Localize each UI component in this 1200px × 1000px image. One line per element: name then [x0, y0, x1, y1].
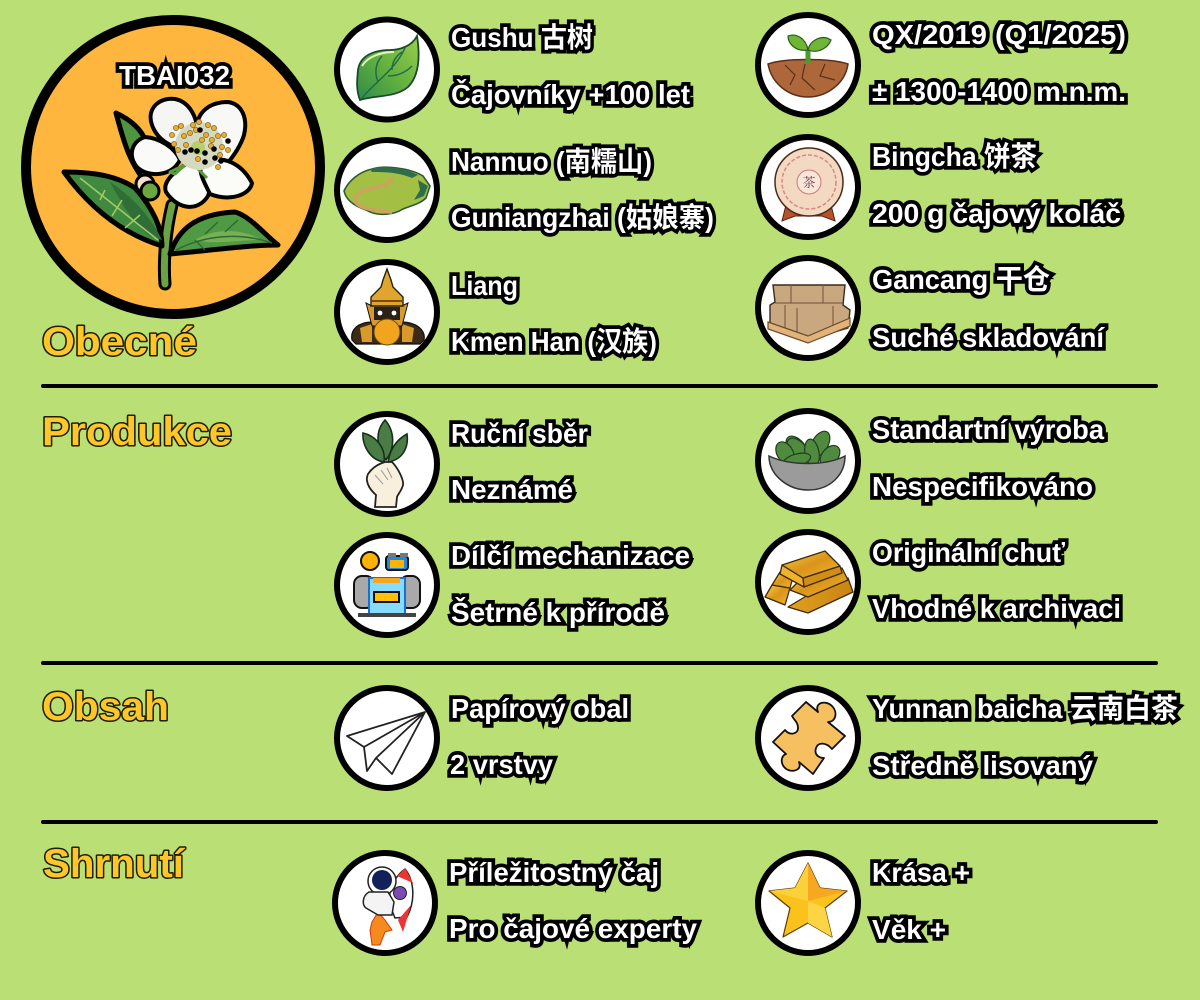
item: Originální chuť	[758, 532, 1121, 632]
text	[872, 537, 1121, 624]
text: Suché skladování	[872, 322, 1105, 353]
text	[450, 693, 629, 780]
text	[449, 857, 697, 944]
item: Bingcha	[758, 137, 1121, 237]
text: Věk +	[872, 914, 946, 945]
item: Příležitostný čaj	[335, 853, 697, 953]
illustration: tea flower	[64, 99, 278, 284]
item: Liang	[337, 262, 657, 362]
icon: hand with leaves	[337, 414, 437, 514]
item: Ruční sběr	[337, 414, 588, 514]
text	[451, 418, 588, 505]
text: Gushu 古树	[451, 22, 593, 53]
text	[872, 857, 970, 945]
text: Gancang 干仓	[872, 264, 1050, 295]
text: 2 vrstvy	[450, 749, 553, 780]
text	[872, 414, 1104, 502]
text: Neznámé	[451, 474, 573, 505]
icon: paper plane	[337, 688, 437, 788]
text	[451, 270, 657, 357]
panel: Produkce	[42, 410, 1121, 635]
text: Guniangzhai (姑娘寨)	[451, 202, 714, 233]
item: Krása	[758, 853, 970, 953]
item: Gushu	[337, 20, 690, 120]
item: Papírový obal	[337, 688, 629, 788]
icon: leaf	[337, 20, 437, 120]
icon: mountain landscape	[337, 140, 437, 240]
item: Gancang	[758, 258, 1105, 358]
text: Vhodné k archivaci	[872, 593, 1121, 624]
product code: TBAI032	[119, 60, 230, 91]
text: QX/2019 (Q1/2025)	[872, 19, 1126, 50]
text: Liang	[451, 270, 518, 301]
item: Standartní výroba	[758, 411, 1104, 511]
text	[872, 141, 1121, 229]
text: Krása +	[872, 857, 970, 888]
icon: bowl of leaves	[758, 411, 858, 511]
icon: astronaut on rocket	[335, 853, 435, 953]
item: QX/2019	[758, 15, 1126, 115]
text: ± 1300-1400 m.n.m.	[872, 76, 1126, 107]
text: Středně lisovaný	[872, 750, 1093, 781]
text: Pro čajové experty	[449, 913, 697, 944]
divider	[41, 661, 1158, 665]
item: Yunnan baicha	[758, 688, 1178, 788]
icon: seedling in soil	[758, 15, 858, 115]
text: Kmen Han (汉族)	[451, 326, 657, 357]
icon: machine	[337, 535, 437, 635]
heading: Obsah: Obsah	[42, 685, 169, 729]
text: Yunnan baicha 云南白茶	[872, 693, 1178, 724]
divider	[41, 384, 1158, 388]
text	[872, 264, 1105, 353]
panel: Obsah	[42, 685, 1178, 788]
icon: puzzle piece	[758, 688, 858, 788]
icon: tea cake: 茶	[802, 172, 816, 191]
icon: guardian figure	[337, 262, 437, 362]
divider	[41, 820, 1158, 824]
icon: gold bars	[758, 532, 858, 632]
heading: Obecné: Obecné	[42, 320, 197, 364]
panel: Obecné	[26, 15, 1126, 364]
text: Ruční sběr	[451, 418, 588, 449]
item: Nannuo	[337, 140, 714, 240]
panel: Shrnutí	[43, 842, 970, 953]
text: Příležitostný čaj	[449, 857, 659, 888]
text: Nannuo (南糯山)	[451, 146, 652, 177]
text	[451, 540, 690, 628]
text: Papírový obal	[451, 693, 629, 724]
text: Šetrné k přírodě	[451, 596, 665, 628]
text: Standartní výroba	[872, 414, 1104, 445]
text	[872, 19, 1126, 107]
icon: pallet of boxes	[758, 258, 858, 358]
text: 200 g čajový koláč	[872, 198, 1121, 229]
badge: tea flower TBAI032	[26, 20, 320, 314]
text: Dílčí mechanizace	[451, 540, 690, 571]
text: Nespecifikováno	[872, 471, 1093, 502]
text	[451, 146, 714, 233]
text: Bingcha 饼茶	[872, 141, 1037, 172]
text	[451, 22, 690, 110]
text	[872, 693, 1178, 781]
icon: gold star	[758, 853, 858, 953]
text: Originální chuť	[872, 537, 1066, 568]
item: Dílčí mechanizace	[337, 535, 690, 635]
text: Čajovníky +100 let	[451, 78, 690, 110]
heading: Shrnutí: Shrnutí	[43, 842, 186, 886]
heading: Produkce: Produkce	[42, 410, 232, 454]
icon: tea cake	[758, 137, 858, 237]
